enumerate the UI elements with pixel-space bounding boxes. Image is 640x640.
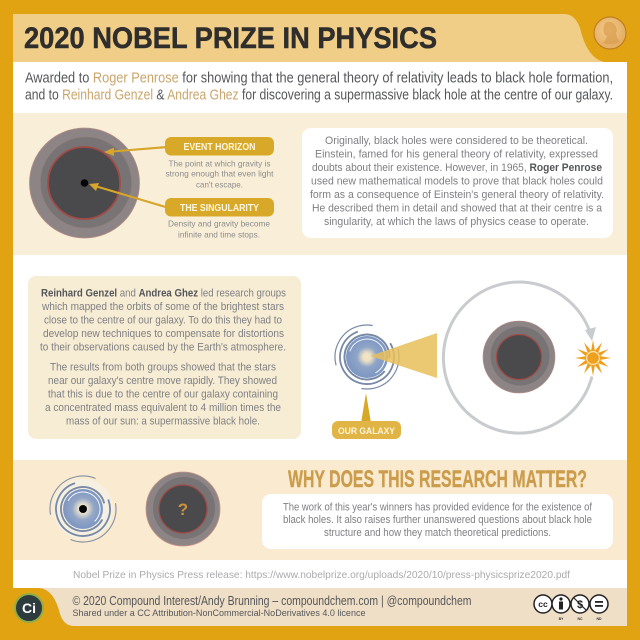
- icon: supermassive black hole: [483, 321, 555, 393]
- icon: unknown black hole: ?: [178, 500, 188, 519]
- panel: genzel and ghez text: to their observations caused by the Earth's atmosphere.: [40, 342, 286, 354]
- title: 2020 NOBEL PRIZE IN PHYSICS: [24, 22, 437, 55]
- footer band: [39, 588, 627, 626]
- icon: nobel medal: [594, 17, 626, 49]
- icon: cc licence badges: BY: [559, 617, 564, 621]
- panel: genzel and ghez text: close to the centre of our galaxy. To do this they had to: [44, 314, 282, 326]
- header band: [13, 14, 604, 62]
- penrose text box: He described them in detail and showed that at their centre is a: [312, 202, 603, 214]
- event horizon description: strong enough that even light: [166, 168, 274, 178]
- icon: black hole diagram: [30, 128, 140, 238]
- penrose text box: singularity, at which the laws of physics cease to operate.: [324, 216, 589, 228]
- arrow: singularity: [89, 183, 166, 208]
- penrose text box: doubts about their existence. However, in 1965, Roger Penrose: [312, 162, 602, 174]
- text box: structure and how they match theoretical predictions.: [324, 527, 551, 539]
- icon: unknown black hole: [146, 472, 220, 546]
- label: our galaxy: [332, 393, 401, 439]
- text box: [262, 494, 613, 549]
- label: event horizon: [165, 137, 274, 156]
- panel: genzel and ghez text: a concentrated mass equivalent to 4 million times the: [45, 402, 281, 414]
- panel: genzel and ghez text: develop new techniques to compensate for distortions: [43, 328, 284, 340]
- panel: why does this research matter: [13, 460, 627, 560]
- panel: genzel and ghez text: that this is due to the centre of our galaxy containing: [48, 388, 278, 400]
- event horizon description: The point at which gravity is: [168, 158, 270, 168]
- orbit arrow: [443, 282, 596, 433]
- footer credit: © 2020 Compound Interest/Andy Brunning – compoundchem.com | @compoundchem: [72, 593, 472, 608]
- label: the singularity: THE SINGULARITY: [180, 203, 259, 214]
- label: the singularity: [165, 198, 274, 216]
- intro text: [25, 70, 613, 104]
- event horizon description: can't escape.: [196, 180, 243, 190]
- panel: genzel and ghez text: The results from both groups showed that the stars: [50, 362, 276, 374]
- singularity description: infinite and time stops.: [178, 230, 260, 240]
- panel: genzel and ghez text: mass of our sun: a supermassive black hole.: [66, 416, 260, 428]
- penrose text box: form as a consequence of Einstein's general theory of relativity.: [310, 189, 604, 201]
- panel: genzel and ghez text: which mapped the orbits of some of the brightest stars: [41, 301, 284, 313]
- arrow: event horizon: [104, 146, 166, 156]
- text box: black holes. It also raises further unanswered questions about black hole: [283, 514, 592, 526]
- icon: star: [575, 340, 611, 376]
- icon: cc licence badges: [534, 595, 608, 621]
- logo: compound interest: [15, 594, 43, 622]
- footer credit: Shared under a CC Attribution-NonCommercial-NoDerivatives 4.0 licence: [72, 608, 366, 619]
- footer credit: [72, 593, 472, 619]
- beam: zoom cone: [370, 333, 437, 378]
- icon: spiral black hole: [45, 471, 121, 547]
- icon: cc licence badges: cc: [538, 599, 548, 609]
- label: our galaxy: OUR GALAXY: [338, 426, 396, 437]
- panel: genzel and ghez text: [28, 276, 301, 439]
- penrose text box: [302, 128, 613, 238]
- icon: cc licence badges: ND: [596, 617, 602, 621]
- panel: genzel and ghez text: near our galaxy's centre move rapidly. They showed: [48, 375, 277, 387]
- event horizon description: [166, 158, 274, 190]
- icon: galaxy: [328, 318, 406, 396]
- singularity description: [168, 218, 270, 240]
- text box: The work of this year's winners has provided evidence for the existence of: [283, 502, 593, 514]
- penrose text box: used new mathematical models to prove that black holes could: [311, 176, 603, 188]
- panel: penrose: [13, 113, 627, 255]
- icon: cc licence badges: $: [577, 599, 583, 611]
- penrose text box: Einstein, famed for his general theory of relativity, expressed: [315, 148, 598, 160]
- penrose text box: Originally, black holes were considered to be theoretical.: [325, 135, 588, 147]
- singularity description: Density and gravity become: [168, 218, 270, 228]
- label: event horizon: EVENT HORIZON: [184, 142, 256, 153]
- icon: cc licence badges: NC: [577, 617, 583, 621]
- panel: genzel and ghez text: Reinhard Genzel and Andrea Ghez led research groups: [41, 288, 286, 300]
- logo: compound interest: Ci: [22, 600, 36, 616]
- source line: Nobel Prize in Physics Press release: https://www.nobelprize.org/uploads/2020/10/press-physicsprize2020.pdf: [73, 569, 570, 581]
